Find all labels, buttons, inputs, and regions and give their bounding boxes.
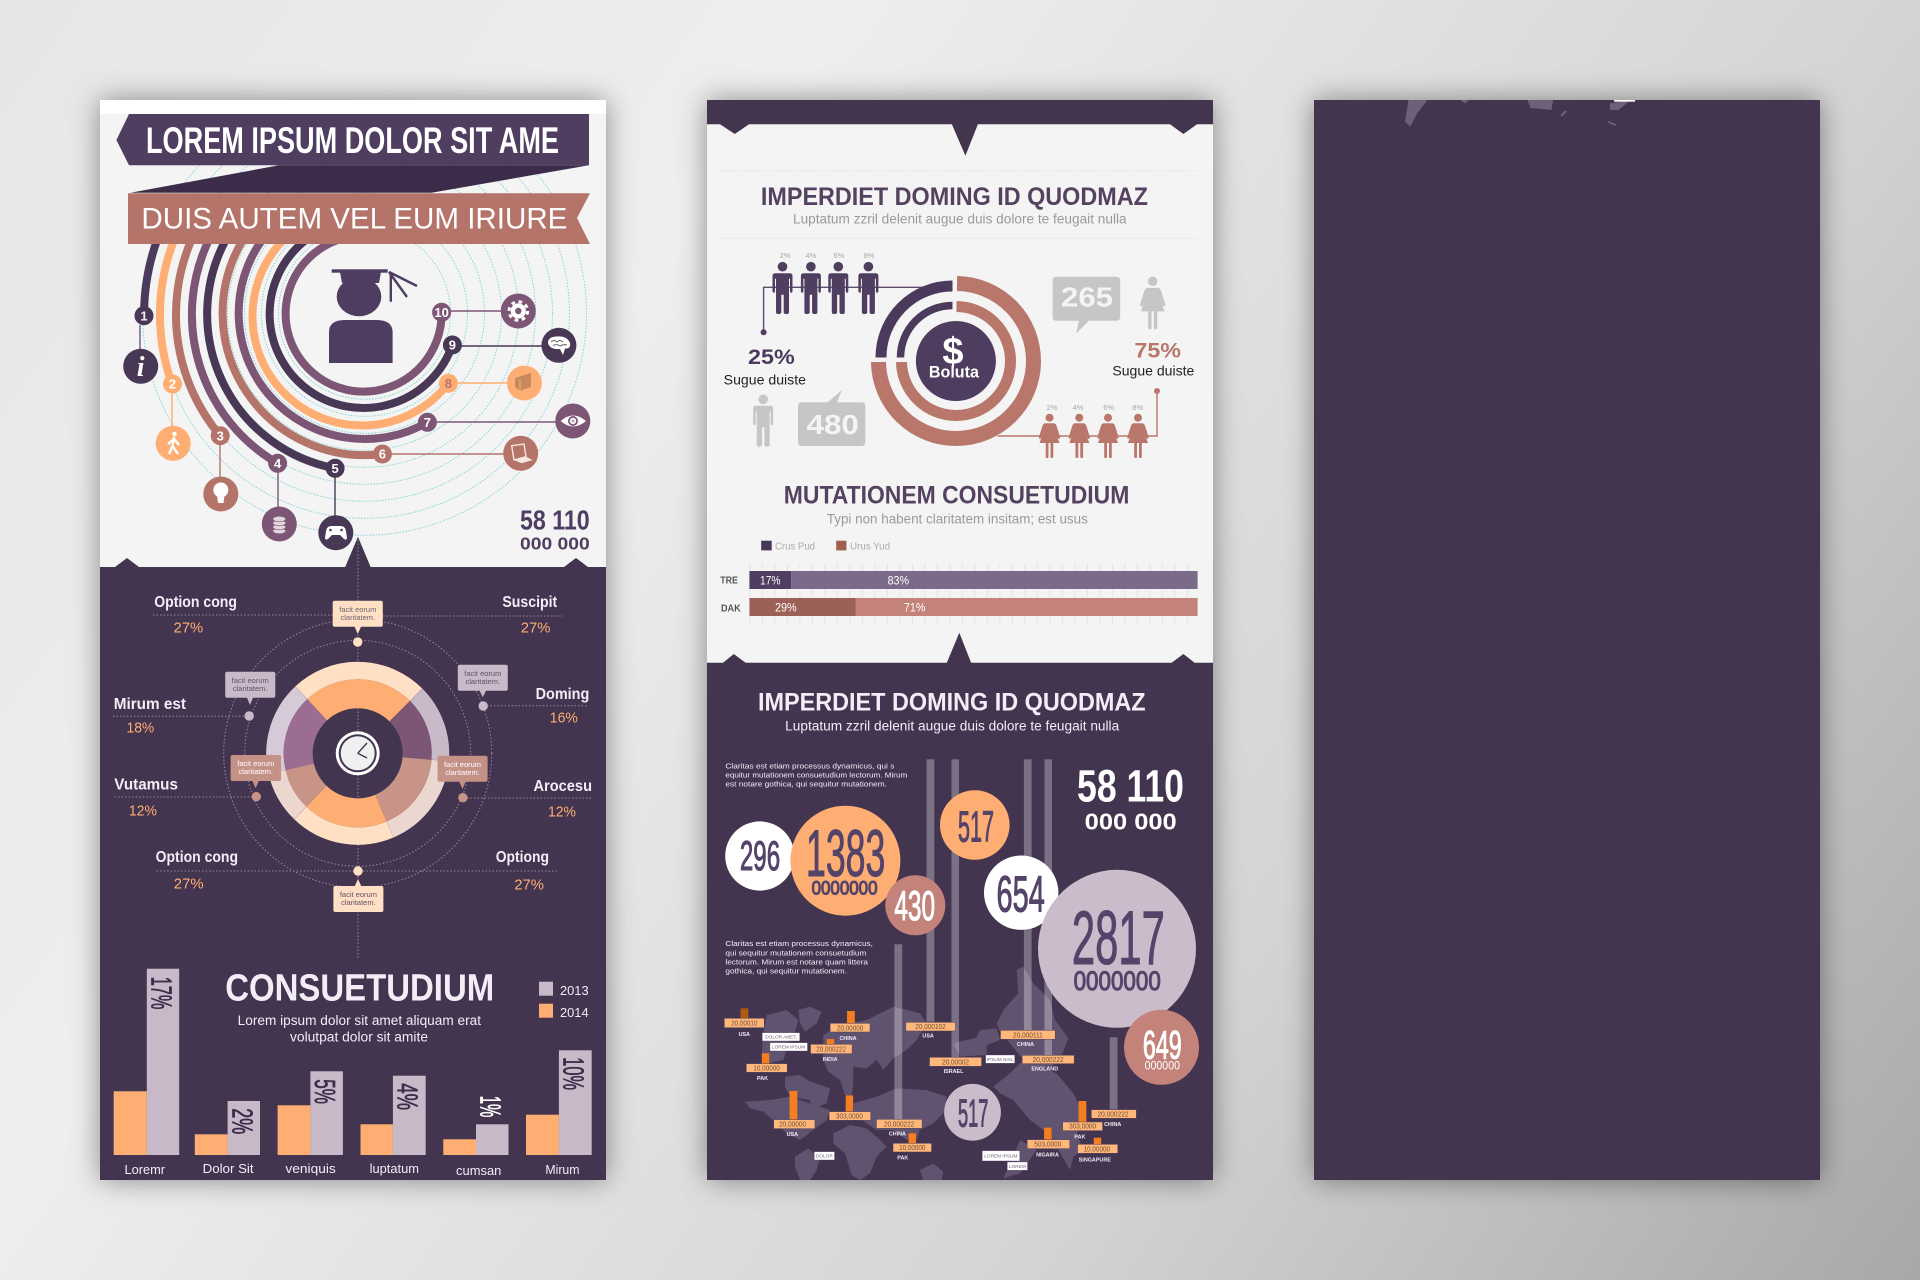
panel: right blank poster — [1314, 100, 1820, 1180]
callout: upper left: claritatem. — [233, 684, 267, 693]
icon: box — [507, 366, 542, 400]
stacked bar chart: 71% — [904, 600, 926, 614]
numbered nodes 1-10: 8 — [445, 376, 452, 391]
bubble: 2817: 0000000 — [1074, 966, 1161, 996]
map data labels — [724, 1008, 1136, 1170]
callout: upper left — [225, 672, 275, 705]
numbered nodes 1-10 — [134, 303, 462, 478]
pie labels: 27% — [174, 875, 204, 892]
map data labels: 20,00000 — [837, 1023, 863, 1032]
bubble: 517: 517 — [958, 803, 994, 852]
heading: mutationem: MUTATIONEM CONSUETUDIUM — [784, 481, 1129, 509]
bar chart — [114, 969, 592, 1178]
numbered nodes 1-10: 4 — [274, 456, 282, 471]
bubble: 430: 430 — [894, 882, 935, 929]
bubble: 2817 — [1038, 870, 1196, 1028]
legend: years — [539, 982, 589, 1020]
pie labels — [114, 594, 592, 893]
stacked bar chart: 17% — [760, 573, 781, 587]
men percentages: 4% — [806, 251, 817, 260]
text: paragraph 1 — [725, 762, 907, 789]
stat: 58 110 dark — [1078, 770, 1182, 830]
women percentages: 2% — [1047, 403, 1058, 412]
bubble: 265 — [1053, 277, 1120, 333]
bar chart: Loremr — [124, 1162, 166, 1177]
legend: years: 2013 — [560, 983, 589, 998]
bubble: 649 — [1124, 1010, 1199, 1085]
bar chart: 4% — [390, 1083, 422, 1110]
map data labels: CHINA — [839, 1036, 857, 1042]
map data labels: 303,0000 — [1069, 1122, 1096, 1131]
pie labels: 18% — [126, 720, 154, 737]
map data labels: 10,00000 — [1084, 1144, 1110, 1153]
pie labels: 27% — [514, 876, 544, 893]
numbered nodes 1-10: 6 — [379, 447, 386, 462]
numbered nodes 1-10: 2 — [169, 376, 176, 392]
callout: top: claritatem. — [341, 613, 375, 622]
bubble: 2817: 2817 — [1072, 896, 1165, 981]
stat: 58 110: 000 000 — [520, 533, 590, 553]
numbered nodes 1-10: 7 — [424, 415, 431, 430]
heading: imperdiet dark: IMPERDIET DOMING ID QUODMAZ — [758, 689, 1146, 717]
stat: 25% — [724, 346, 806, 387]
stat: 58 110: 58 110 — [520, 504, 590, 535]
map data labels: 303,0000 — [836, 1111, 863, 1120]
icon: info — [123, 349, 158, 384]
map data labels: CHINA — [889, 1131, 906, 1137]
pie labels: Optiong — [496, 849, 549, 866]
map data labels: 20,00000 — [779, 1120, 806, 1129]
map data labels: 20,000222 — [884, 1119, 914, 1128]
map data labels: SINGAPURE — [1079, 1157, 1111, 1163]
bar chart: 10% — [556, 1057, 588, 1090]
bar chart: Dolor Sit — [203, 1161, 254, 1176]
icon: laptop — [503, 436, 538, 471]
bubble: 649: 649 — [1143, 1023, 1182, 1067]
stat: 58 110 dark: 000 000 — [1085, 808, 1177, 834]
bubble: 1383: 0000000 — [812, 878, 878, 899]
text: subtitle: Luptatum zzril delenit augue duis dolore te feugait nulla — [793, 211, 1127, 226]
map data labels: LOREM IPSUM — [772, 1045, 805, 1050]
map data labels: USA — [739, 1032, 750, 1038]
section: data bubbles background — [707, 633, 1213, 1180]
bubble: 517 — [940, 790, 1010, 860]
map data labels: 20,00002 — [942, 1057, 969, 1066]
connector: men — [761, 287, 923, 335]
text: paragraph 2: gothica, qui sequitur mutationem. — [725, 966, 847, 975]
map data labels: CHINA — [1017, 1042, 1034, 1048]
stat: 58 110 dark: 58 110 — [1077, 761, 1184, 812]
connector lines — [140, 311, 570, 530]
map data labels: ENGLAND — [1031, 1067, 1058, 1073]
legend: years: 2014 — [560, 1005, 589, 1020]
stacked bar chart — [720, 568, 1198, 620]
callout: lower left: claritatem. — [239, 767, 273, 776]
map data labels: 10,00000 — [899, 1143, 925, 1152]
map data labels: USA — [922, 1033, 934, 1039]
women percentages: 6% — [1103, 403, 1114, 412]
ring chart: $ — [942, 331, 963, 373]
map data labels: NIGAIRA — [1036, 1152, 1059, 1158]
numbered nodes 1-10: 10 — [434, 305, 449, 320]
callout: upper left: facit eorum — [232, 676, 269, 685]
dotted concentric rings — [142, 165, 587, 536]
icons: men row — [772, 262, 878, 314]
dotted guide rings and lines — [113, 540, 592, 960]
icon: grey man — [753, 394, 773, 447]
text: subtitle dark: Luptatum zzril delenit augue duis dolore te feugait nulla — [785, 719, 1120, 734]
ring chart — [878, 284, 1033, 438]
bar chart: 17% — [144, 977, 176, 1009]
men percentages: 2% — [780, 251, 791, 260]
icon: graduate — [329, 269, 417, 363]
map data labels: 20,000102 — [915, 1022, 946, 1031]
icon: gear — [501, 294, 536, 328]
men percentages: 6% — [834, 251, 845, 260]
map data labels: INDIA — [823, 1057, 838, 1063]
text: paragraph 2: lectorum. Mirum est notare quam littera — [725, 957, 869, 966]
bubble: 517 lower — [944, 1084, 1001, 1141]
heading: consuetudium: CONSUETUDIUM — [225, 968, 494, 1010]
header banner: lorem ipsum — [116, 114, 589, 193]
map data labels: LOREM — [1009, 1164, 1026, 1169]
bar chart: veniquis — [285, 1161, 336, 1176]
callout: lower right: claritatem. — [445, 768, 480, 777]
pie labels: Vutamus — [114, 776, 178, 794]
callout: lower left: facit eorum — [237, 759, 274, 768]
stacked bar chart: TRE — [720, 575, 738, 586]
bar chart: luptatum — [370, 1161, 419, 1176]
map data labels: 20,000222 — [816, 1044, 846, 1053]
text: paragraph 2: qui sequitur mutationem consuetudium — [725, 948, 866, 957]
text: paragraph 1: Claritas est etiam processus dynamicus, qui s — [725, 762, 895, 771]
callout: upper right — [458, 665, 508, 697]
header banner: lorem ipsum: LOREM IPSUM DOLOR SIT AME — [146, 120, 559, 161]
stacked bar chart: 29% — [775, 600, 797, 614]
bar chart: 1% — [474, 1096, 506, 1117]
icon: eye — [555, 404, 590, 438]
bubble: 296: 296 — [740, 832, 780, 879]
stat: 58 110 — [520, 504, 590, 553]
map data labels: PAK — [897, 1155, 908, 1161]
women percentages — [1047, 405, 1143, 410]
numbered nodes 1-10: 5 — [331, 461, 339, 476]
heading: imperdiet: IMPERDIET DOMING ID QUODMAZ — [761, 183, 1148, 211]
callout: lower right: facit eorum — [444, 760, 481, 769]
sub banner: duis autem — [128, 193, 590, 244]
pie labels: 27% — [521, 620, 550, 637]
bubble: 296 — [725, 821, 794, 891]
map data labels: ISRAEL — [944, 1069, 964, 1075]
callout: upper right: facit eorum — [464, 669, 501, 678]
pie labels: Option cong — [154, 594, 237, 611]
map data labels: 20,000111 — [1013, 1030, 1043, 1039]
stat: 25%: Sugue duiste — [724, 371, 806, 387]
callout: lower right — [438, 756, 488, 789]
women percentages: 4% — [1073, 403, 1084, 412]
callout: lower left — [231, 755, 281, 788]
callout: bottom: claritatem. — [341, 898, 376, 907]
bubble: 517 lower: 517 — [958, 1093, 988, 1136]
map data labels: LOREM IPSUM — [984, 1153, 1017, 1158]
legend: stacked bars: Urus Yud — [850, 541, 890, 552]
icon: database stack — [262, 506, 297, 542]
pie labels: Arocesu — [534, 778, 592, 795]
bubble: 654 — [984, 856, 1058, 930]
text: consuetudium description — [238, 1013, 481, 1045]
text: paragraph 1: est notare gothica, qui sequitur mutationem. — [725, 780, 887, 789]
map data labels: USA — [787, 1132, 798, 1138]
map data labels: DOLOR AMET, — [765, 1035, 797, 1040]
icon: light bulb — [203, 476, 238, 512]
ring chart: Boluta — [929, 363, 979, 382]
pie labels: Mirum est — [114, 696, 187, 713]
icon: gamepad — [318, 515, 353, 550]
icon: walking person — [156, 426, 191, 461]
sub banner: duis autem: DUIS AUTEM VEL EUM IRIURE — [141, 203, 567, 236]
bubble: 430 — [885, 875, 945, 935]
section: pie chart background — [100, 537, 606, 1180]
map data labels: PAK — [757, 1076, 768, 1082]
pie labels: Suscipit — [502, 594, 558, 611]
text: paragraph 2: Claritas est etiam processus dynamicus, — [725, 939, 873, 948]
pie labels: 12% — [129, 803, 157, 820]
stacked bar chart: 83% — [888, 573, 909, 587]
men percentages — [780, 253, 874, 258]
icons: women row — [1039, 414, 1149, 458]
translucent vertical bars — [894, 759, 1118, 1119]
legend: stacked bars: Crus Pud — [775, 541, 815, 552]
map data labels: 20,000222 — [1097, 1109, 1129, 1118]
donut chart — [241, 636, 475, 870]
bar chart: 5% — [308, 1079, 340, 1104]
icon: brain — [541, 328, 576, 363]
icon: info: i — [137, 352, 145, 383]
pie labels: Doming — [536, 686, 589, 703]
bubble: 1383 — [790, 806, 900, 916]
world map — [745, 967, 1087, 1180]
men percentages: 8% — [864, 251, 875, 260]
pie labels: 12% — [548, 804, 576, 821]
numbered nodes 1-10: 3 — [217, 428, 224, 444]
pie labels: Option cong — [156, 849, 238, 866]
connector: women — [998, 388, 1160, 436]
map data labels: 20,00010 — [731, 1018, 757, 1027]
map data labels: 20,000222 — [1033, 1055, 1064, 1064]
map data labels: PAK — [1074, 1135, 1086, 1141]
map data labels: 10,00000 — [753, 1063, 780, 1072]
text: consuetudium description: volutpat dolor sit amite — [290, 1030, 428, 1045]
map data labels: IPSUM NIXL — [987, 1057, 1014, 1062]
bar chart: 2% — [225, 1108, 257, 1134]
panel: left poster — [100, 91, 606, 1180]
callout: upper right: claritatem. — [466, 677, 500, 686]
stat: 25%: 25% — [748, 346, 795, 369]
icon: grey woman — [1140, 277, 1165, 329]
text: paragraph 2 — [725, 939, 873, 975]
legend: stacked bars — [761, 540, 890, 550]
callout: top: facit eorum — [339, 605, 376, 614]
panel: middle poster — [707, 100, 1213, 1180]
node dots — [244, 637, 488, 876]
bubble: 265: 265 — [1061, 282, 1113, 313]
map data labels: CHINA — [1104, 1122, 1121, 1128]
text: paragraph 1: equitur mutationem consuetudium lectorum. Mirum — [725, 771, 907, 780]
callout: bottom — [333, 879, 383, 912]
numbered nodes 1-10: 1 — [140, 308, 148, 324]
bubble: 654: 654 — [996, 866, 1045, 923]
stat: 75% — [1113, 343, 1194, 378]
bubble: 480: 480 — [806, 409, 859, 440]
callout: top — [333, 601, 383, 634]
bar chart: cumsan — [456, 1163, 501, 1178]
callout: bottom: facit eorum — [340, 890, 377, 899]
bubble: 1383: 1383 — [806, 816, 885, 890]
bubble: 480 — [798, 390, 865, 446]
stat: 75%: 75% — [1134, 340, 1181, 363]
panel shadows — [100, 100, 1820, 1180]
bubble: 649: 000000 — [1145, 1058, 1180, 1072]
stat: 75%: Sugue duiste — [1112, 363, 1195, 379]
text: consuetudium description: Lorem ipsum dolor sit amet aliquam erat — [238, 1013, 481, 1028]
map data labels: DOLOR — [816, 1154, 833, 1159]
text: subtitle 2: Typi non habent claritatem insitam; est usus — [827, 511, 1088, 526]
spiral arcs — [144, 240, 452, 468]
map data labels: 503,0000 — [1034, 1140, 1061, 1149]
stacked bar chart: DAK — [721, 603, 741, 614]
numbered nodes 1-10: 9 — [449, 338, 456, 353]
pie labels: 27% — [174, 620, 203, 637]
bar chart: Mirum — [545, 1162, 580, 1177]
pie labels: 16% — [550, 710, 578, 727]
icon: clock — [336, 731, 380, 775]
women percentages: 8% — [1132, 403, 1144, 412]
